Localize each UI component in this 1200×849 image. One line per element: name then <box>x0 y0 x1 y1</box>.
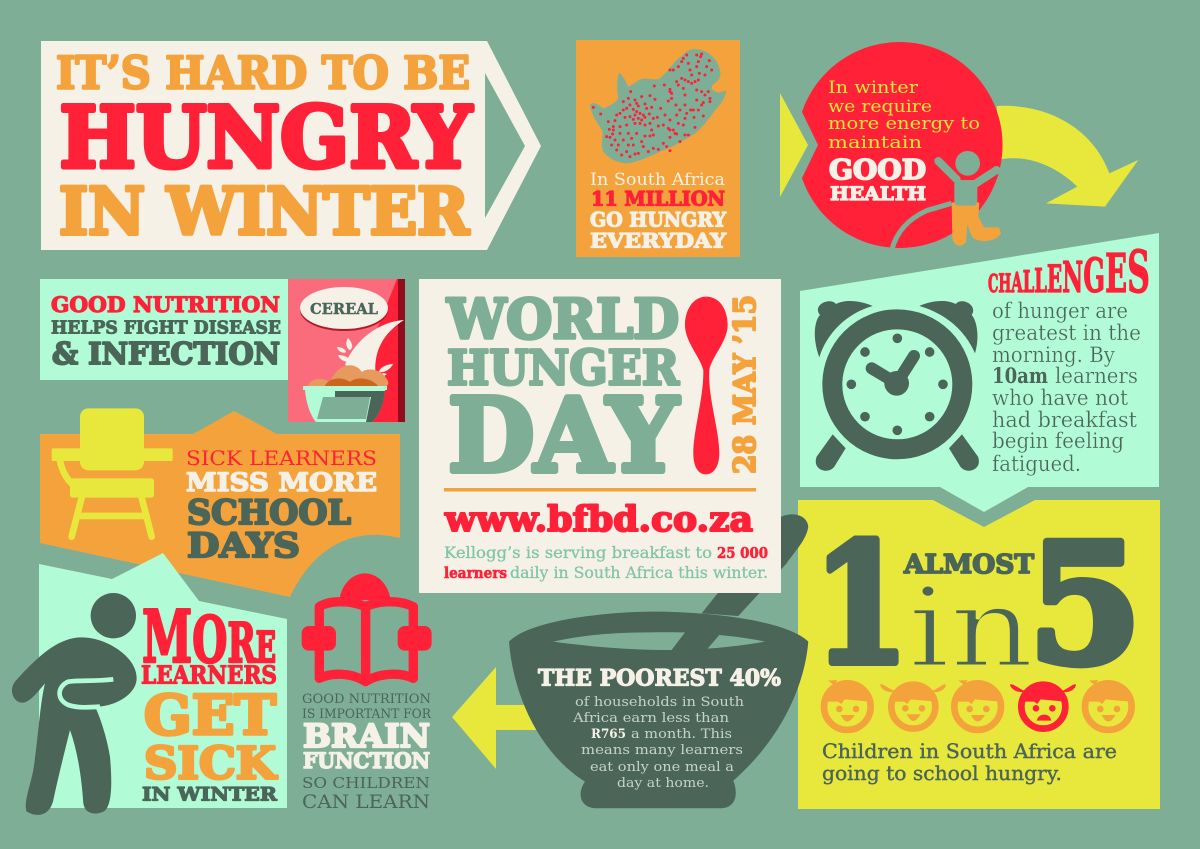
cereal shadow <box>325 379 378 386</box>
text: 11 million: 11 MILLION <box>591 187 725 210</box>
text: begin feeling: begin feeling <box>992 429 1124 453</box>
icon: school desk chair <box>52 408 173 537</box>
panel: challenges <box>800 233 1159 512</box>
text: fatigued: fatigued. <box>992 452 1081 476</box>
yellow left arrow <box>452 667 560 769</box>
right hand <box>398 626 432 651</box>
left hand <box>302 626 336 651</box>
icon: children faces <box>824 680 1132 730</box>
fuel nozzle curve <box>892 203 952 251</box>
panel: title <box>41 41 541 250</box>
text: good nutrition: GOOD NUTRITION <box>302 692 431 707</box>
text: school: SCHOOL <box>187 492 351 532</box>
box dark side <box>398 279 405 422</box>
flakes <box>337 338 393 378</box>
text: r765: R765 <box>591 727 626 742</box>
panel: good health <box>780 42 1138 251</box>
text: we require: we require <box>828 97 932 117</box>
chair back <box>80 408 144 470</box>
title line 3: IN WINTER <box>59 174 469 250</box>
box red fold <box>340 279 405 422</box>
text: of hunger are: of hunger are <box>992 299 1128 323</box>
cereal label <box>300 287 388 329</box>
face 3 <box>954 680 1001 730</box>
icon: alarm clock <box>815 301 979 471</box>
child head <box>955 151 980 176</box>
icon: sick person <box>12 593 137 815</box>
clock tick marks <box>851 338 943 430</box>
person head <box>91 593 136 638</box>
text: learners: learners <box>444 564 507 582</box>
text: miss more: MISS MORE <box>186 467 377 497</box>
text: health: HEALTH <box>830 184 926 205</box>
icon: cereal box <box>288 279 405 422</box>
text: morning by: morning. By <box>992 343 1115 367</box>
heading: world: WORLD <box>446 287 679 351</box>
title line 1: IT’S HARD TO BE <box>56 47 470 100</box>
red circle <box>802 42 1003 248</box>
panel: world hunger day <box>419 279 781 593</box>
open book outline <box>319 602 413 682</box>
text: 10am: 10am <box>992 363 1048 388</box>
clock hands <box>872 356 914 383</box>
text: get: GET <box>144 683 276 747</box>
arm gap <box>60 679 113 707</box>
seat <box>70 478 154 498</box>
text: days: DAYS <box>187 525 300 565</box>
text: greatest in the: greatest in the <box>992 321 1141 345</box>
face 5 <box>1085 680 1132 730</box>
text: more energy to: more energy to <box>828 114 980 134</box>
text: good: GOOD <box>829 154 926 186</box>
bells <box>815 301 977 357</box>
icon: running child <box>892 151 1000 251</box>
text: means many learners: means many learners <box>581 743 743 758</box>
mint background <box>40 279 288 380</box>
website: www.bfbd.co.za <box>444 500 753 540</box>
child legs <box>953 203 1000 245</box>
text: helps fight disease: HELPS FIGHT DISEASE <box>51 318 281 338</box>
text: kellogg's: Kellogg’s is serving breakfast to <box>444 543 712 562</box>
text: had breakfast: had breakfast <box>992 408 1138 432</box>
text: in: in <box>908 564 1034 692</box>
bowl shape <box>509 612 808 808</box>
cereal label shadow <box>300 289 388 331</box>
text: sick: SICK <box>144 738 278 790</box>
person body <box>12 637 137 815</box>
curved yellow arrow <box>997 106 1138 207</box>
text: and infection: & INFECTION <box>52 337 280 372</box>
orange banner <box>40 411 400 597</box>
text: day at home: day at home. <box>617 776 709 791</box>
notch <box>933 500 1035 527</box>
text: in winter: In winter <box>828 78 919 98</box>
text: go hungry: GO HUNGRY <box>590 208 727 231</box>
text: of households in south: of households in South <box>575 695 745 710</box>
box front <box>288 279 405 422</box>
text: who have not: who have not <box>992 386 1129 410</box>
text: challenges: CHALLENGES <box>988 238 1150 306</box>
face 1 <box>824 680 871 730</box>
text: sick learners: SICK LEARNERS <box>186 446 377 470</box>
text: almost: ALMOST <box>903 549 1034 580</box>
text: good nutrition: GOOD NUTRITION <box>51 293 280 318</box>
title banner <box>41 41 541 250</box>
yellow triangle <box>780 93 808 197</box>
text: in winter: IN WINTER <box>142 783 277 805</box>
panel: poorest 40 percent <box>452 514 808 808</box>
divider <box>444 488 756 492</box>
desk surface <box>52 448 173 461</box>
clock ring <box>832 319 962 449</box>
text: a month this: a month. This <box>631 727 732 742</box>
cereal label text: CEREAL <box>310 300 378 318</box>
text: In South Africa: In South Africa <box>590 170 725 190</box>
text: going to school hungry: going to school hungry. <box>822 761 1062 785</box>
panel: good nutrition <box>40 279 288 380</box>
icon: reading child <box>302 573 432 682</box>
title line 2: HUNGRY <box>60 88 472 187</box>
orange background <box>576 40 740 257</box>
numeral 1: 1 <box>813 507 909 701</box>
hunger dots <box>593 54 712 157</box>
feet <box>816 434 979 471</box>
bowl opening <box>553 632 765 650</box>
text: eat only one meal a: eat only one meal a <box>590 760 734 775</box>
text: maintain: maintain <box>828 133 922 153</box>
text: 25 000: 25 000 <box>717 544 768 562</box>
panel: sick learners <box>40 408 400 597</box>
text: is important for: IS IMPORTANT FOR <box>302 707 432 722</box>
panel: South Africa map <box>576 40 740 257</box>
text: so children: SO CHILDREN <box>302 774 430 792</box>
date text: 28 MAY ’15 <box>728 295 763 474</box>
panel: brain function <box>302 573 432 813</box>
milk splash <box>345 320 404 378</box>
icon: red spoon <box>685 297 728 474</box>
bowl centre <box>317 397 370 419</box>
yellow background <box>798 500 1160 809</box>
cereal pieces <box>308 365 388 386</box>
text: children in south africa: Children in South Africa are <box>822 739 1117 763</box>
face 4 sad <box>1010 683 1076 729</box>
text: learners: LEARNERS <box>141 660 277 689</box>
text: learners: learners <box>1055 364 1138 388</box>
bowl shade <box>335 391 385 422</box>
mint shape <box>39 553 287 808</box>
map of South Africa <box>590 49 726 163</box>
mint shape <box>800 233 1159 512</box>
bowl <box>303 386 387 422</box>
reader head <box>339 573 391 600</box>
face 2 <box>880 683 946 729</box>
text: daily in south africa: daily in South Africa this winter. <box>510 563 768 582</box>
heading: day: DAY <box>448 376 680 495</box>
panel: more learners get sick <box>12 553 287 815</box>
heading: hunger: HUNGER <box>447 340 679 396</box>
spoon handle <box>702 514 808 616</box>
text: everyday: EVERYDAY <box>590 229 727 252</box>
text: brain: BRAIN <box>303 717 430 755</box>
text: africa earn less than: Africa earn less than <box>572 711 730 726</box>
panel: 1 in 5 <box>798 500 1160 809</box>
clock hub <box>884 371 909 396</box>
text: function: FUNCTION <box>303 748 430 773</box>
chair legs <box>60 461 152 537</box>
cream background <box>419 279 781 593</box>
text: more: MORE <box>142 594 276 679</box>
numeral 5: 5 <box>1028 507 1142 701</box>
text: can learn: CAN LEARN <box>302 791 430 813</box>
text: the poorest: THE POOREST 40% <box>538 665 781 691</box>
child upper body <box>938 161 997 202</box>
